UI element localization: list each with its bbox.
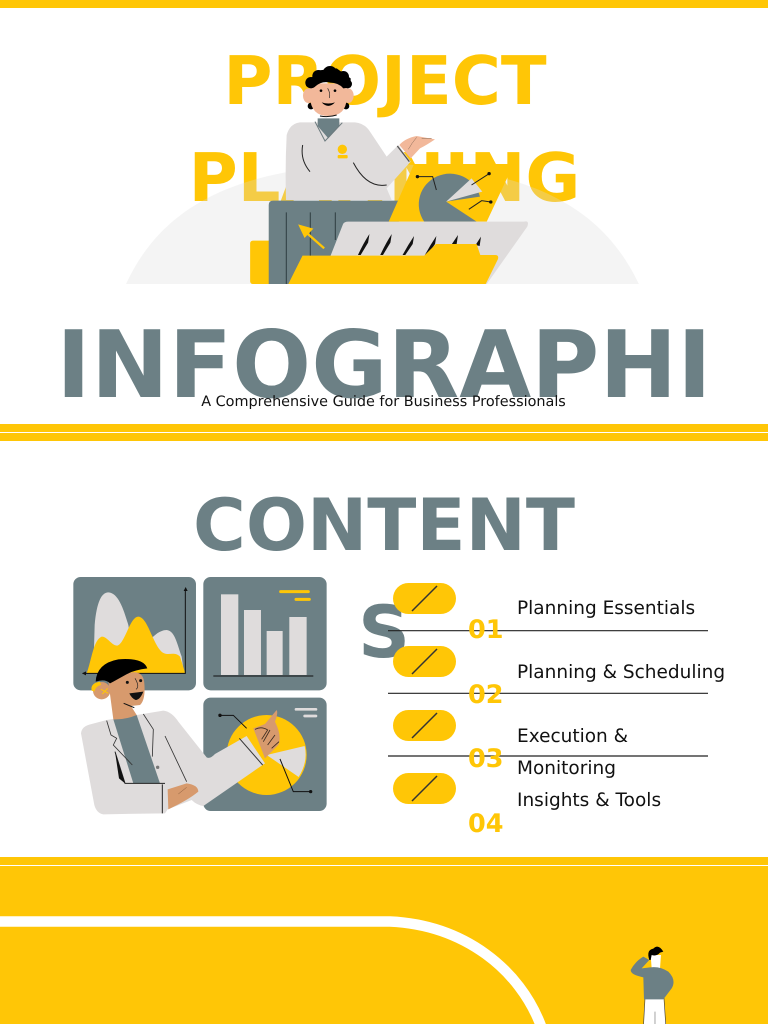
heading: infographic: INFOGRAPHI — [56, 311, 712, 419]
item 1: 01 — [468, 615, 504, 645]
divider bars — [0, 424, 768, 441]
item 1: Planning Essentials — [517, 598, 695, 619]
item 4 — [393, 773, 661, 839]
item 4: 04 — [468, 809, 504, 839]
item 3: 03 — [468, 744, 504, 774]
item 3: Monitoring — [517, 758, 616, 779]
item 3 — [393, 710, 628, 779]
title: project planning: PLANNING — [189, 139, 580, 217]
illustration: presenter at desk — [126, 66, 639, 284]
rule lines — [388, 631, 708, 756]
item 2 — [393, 646, 725, 710]
item 3: Execution & — [517, 726, 628, 747]
item 1 — [393, 583, 695, 645]
title: project planning: PROJECT — [223, 42, 547, 120]
item 4: Insights & Tools — [517, 790, 661, 811]
subtitle: A Comprehensive Guide for Business Professionals — [201, 394, 566, 410]
illustration: analyst with charts — [73, 577, 327, 814]
title: project planning — [189, 42, 580, 217]
heading: contents: CONTENT — [193, 483, 575, 567]
footer panel — [0, 857, 768, 1024]
heading: contents: S — [358, 590, 410, 674]
top bar — [0, 0, 768, 8]
icon: standing person — [631, 947, 674, 1024]
item 2: 02 — [468, 680, 504, 710]
contents list — [388, 583, 725, 839]
item 2: Planning & Scheduling — [517, 662, 725, 683]
heading: contents — [193, 483, 575, 674]
